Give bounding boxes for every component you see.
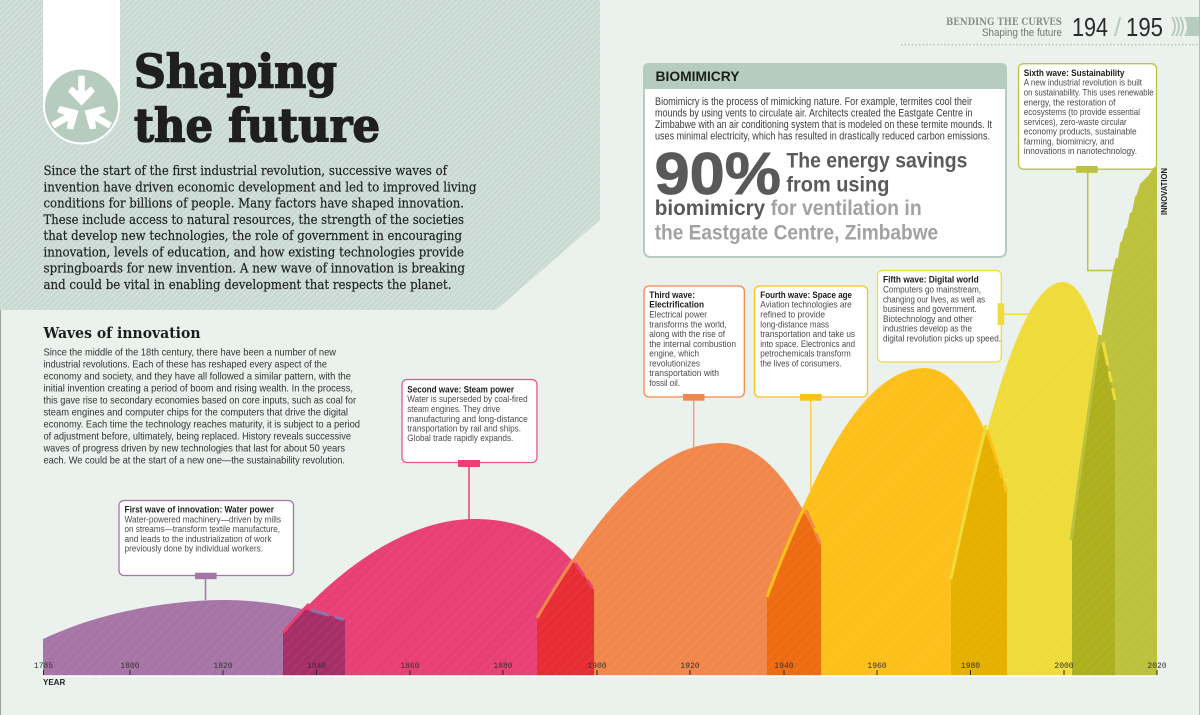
text block: waves of innovation: of adjustment before, ultimately, being replaced. History reveals successive (44, 432, 351, 443)
overlap: wave 2 and 3 (537, 562, 594, 676)
text block: statistic caption: biomimicry (655, 196, 765, 220)
chart: waves of innovation (34, 160, 1169, 687)
page header: 194 (1072, 12, 1108, 42)
callout: fifth wave: business and government. (883, 303, 977, 314)
text block: waves of innovation: initial invention creating a period of boom and rising wealth. In the process, (44, 384, 353, 395)
callout: sixth wave: innovations in nanotechnology. (1024, 145, 1137, 156)
callout: fourth wave: transportation and take us (760, 328, 855, 339)
overlap: wave 4 and 5 (951, 433, 1007, 676)
callout: sixth wave: A new industrial revolution is built (1024, 77, 1142, 88)
text block: statistic caption: from using (786, 173, 889, 197)
callout: third wave: fossil oil. (649, 377, 680, 388)
axis labels and ticks: 1940 (774, 662, 794, 671)
text block: intro: and could be vital in enabling development that respects the planet. (44, 278, 452, 293)
axis labels and ticks: 2000 (1054, 662, 1074, 671)
title: the future (134, 98, 380, 152)
callout: fifth wave (878, 270, 1029, 362)
page header: BENDING THE CURVES (946, 17, 1062, 28)
axis labels and ticks: 1820 (213, 662, 233, 671)
axis labels and ticks: 2020 (1147, 662, 1167, 671)
callout: second wave: Global trade rapidly expands. (407, 432, 513, 443)
callout: fifth wave: digital revolution picks up speed. (883, 332, 1001, 343)
text block: intro: innovation, levels of education, and how existing technologies provide (44, 245, 464, 260)
axis labels and ticks: 1860 (400, 662, 420, 671)
text block: intro: Since the start of the first industrial revolution, successive waves of (44, 164, 448, 179)
callout: fourth wave: Aviation technologies are (760, 299, 852, 310)
callout: sixth wave: energy, the restoration of (1024, 96, 1116, 107)
callout: first wave: First wave of innovation: Water power (124, 504, 274, 514)
text block: waves of innovation: waves of progress driven by new technologies that last for about 50 years (43, 444, 345, 455)
callout: fourth wave: the lives of consumers. (760, 357, 842, 368)
callout: sixth wave: ecosystems (to provide essential (1024, 106, 1140, 117)
page header: 195 (1126, 12, 1163, 42)
page header (901, 12, 1199, 45)
rising and falling edge strokes (283, 335, 1115, 633)
axis labels and ticks: 1785 (34, 662, 53, 671)
text block: waves of innovation: industrial revolutions. Each of these has reshaped every aspect of the (44, 360, 327, 371)
title (134, 44, 380, 152)
callout: first wave: Water-powered machinery—driven by mills (124, 513, 281, 524)
axis labels and ticks (34, 662, 1167, 675)
axis labels and ticks: 1960 (867, 662, 887, 671)
text block: biomimicry description: mounds by using vents to circulate air. Architects created the Eastgate Centre in (655, 108, 973, 120)
callout: second wave: Second wave: Steam power (407, 383, 514, 394)
callout: third wave: transportation with (649, 367, 719, 378)
page header: / (1114, 12, 1122, 42)
callout: fourth wave: Fourth wave: Space age (760, 289, 852, 300)
heading: waves of innovation: Waves of innovation (43, 324, 201, 342)
text block: waves of innovation: this gave rise to secondary economies based on core inputs, such as coal for (44, 396, 357, 407)
heading: biomimicry: BIOMIMICRY (656, 68, 740, 84)
overlap: wave 1 and 2 (283, 610, 345, 676)
callout: third wave: Electrification (649, 299, 704, 310)
callout: sixth wave: Sixth wave: Sustainability (1024, 67, 1125, 78)
text block: biomimicry description: Biomimicry is the process of mimicking nature. For example, termites cool their (655, 96, 972, 108)
axis labels and ticks: 1880 (493, 662, 513, 671)
callout: third wave: Electrical power (649, 308, 707, 320)
callout: third wave: along with the rise of (649, 328, 725, 339)
callout: first wave: previously done by individual workers. (124, 543, 263, 554)
axis labels and ticks: 1840 (307, 662, 326, 671)
page header: Shaping the future (982, 27, 1062, 39)
callout: second wave: transportation by rail and ships. (407, 423, 521, 434)
callout: third wave: revolutionizes (649, 357, 700, 368)
callout: first wave: on streams—transform textile manufacture, (124, 523, 280, 534)
text block: intro: invention have driven economic development and led to improved living (44, 180, 477, 195)
text block: waves of innovation: each. We could be at the start of a new one—the sustainability revolution. (44, 456, 345, 467)
icon: ribbon with converging arrows (43, 0, 120, 144)
statistic: 90%: 90% (654, 141, 781, 207)
callout: fifth wave: changing our lives, as well as (883, 293, 985, 304)
callout: third wave: the internal combustion (649, 338, 736, 349)
wave 1: water power (43, 600, 345, 676)
text block: intro: that develop new technologies, the role of government in encouraging (44, 229, 462, 244)
axis labels and ticks: 1980 (961, 662, 980, 671)
text block: biomimicry description: uses minimal electricity, which has resulted in drastically reduced carbon emissions. (655, 131, 990, 143)
callout: third wave: Third wave: (649, 289, 695, 300)
callout: fifth wave: Biotechnology and other (883, 313, 973, 324)
axis title: innovation: INNOVATION (1160, 168, 1169, 215)
callout: third wave: transforms the world, (649, 318, 727, 329)
callout: sixth wave: economy products, sustainable (1024, 126, 1136, 137)
callout: second wave: Water is superseded by coal-fired (407, 393, 528, 404)
callout: fifth wave: Fifth wave: Digital world (883, 274, 979, 285)
callout: fifth wave: Computers go mainstream, (883, 284, 981, 294)
wave 2: steam power (283, 519, 594, 676)
callout: first wave (119, 500, 294, 600)
callout: fifth wave: industries develop as the (883, 323, 972, 334)
callout: second wave (402, 380, 537, 520)
text block: waves of innovation: economy. Each time the technology reaches maturity, it is subject to a period (44, 420, 360, 431)
text block: waves of innovation (43, 348, 360, 467)
text block: waves of innovation: steam engines and computer chips for the computers that drive the digital (44, 408, 348, 419)
callout: fourth wave: petrochemicals transform (760, 348, 851, 359)
callout: third wave: engine, which (649, 348, 699, 359)
axis labels and ticks: 1920 (680, 662, 700, 671)
callout: sixth wave (1018, 64, 1156, 271)
callout: second wave: steam engines. They drive (407, 403, 500, 414)
overlap: wave 5 and 6 (1072, 343, 1115, 676)
panel: intro background (0, 0, 600, 310)
panel: biomimicry (643, 63, 1007, 257)
wave 3: electrification (537, 443, 821, 676)
text block: statistic caption: for ventilation in (771, 196, 922, 220)
text block: biomimicry description: Zimbabwe with an air conditioning system that is modeled on these termite mounds. It (655, 119, 992, 131)
axis baseline (43, 675, 1157, 677)
text block: statistic caption (655, 149, 967, 244)
callout: third wave (644, 286, 744, 447)
text block: intro (44, 164, 477, 293)
wave 6: sustainability (1072, 167, 1157, 676)
callout: second wave: manufacturing and long-distance (407, 413, 528, 424)
callout: first wave: and leads to the industrialization of work (124, 533, 272, 544)
callout: fourth wave: refined to provide (760, 308, 825, 320)
callout: sixth wave: farming, biomimicry, and (1024, 135, 1114, 146)
callout: fourth wave: long-distance mass (760, 318, 829, 329)
axis labels and ticks: 1900 (587, 662, 607, 671)
axis labels and ticks: 1800 (120, 662, 140, 671)
text block: intro: conditions for billions of people. Many factors have shaped innovation. (44, 197, 464, 212)
callout: sixth wave: on sustainability. This uses renewable (1024, 86, 1154, 98)
text block: statistic caption: the Eastgate Centre, Zimbabwe (655, 220, 938, 244)
text block: intro: springboards for new invention. A new wave of innovation is breaking (44, 262, 465, 277)
title: Shaping (134, 44, 337, 98)
text block: waves of innovation: Since the middle of the 18th century, there have been a number of new (44, 348, 337, 359)
text block: biomimicry description (655, 96, 992, 143)
axis title: year: YEAR (43, 678, 65, 687)
text block: statistic caption: The energy savings (786, 149, 967, 173)
overlap: wave 3 and 4 (767, 509, 821, 676)
callout: sixth wave: services), zero-waste circular (1024, 116, 1127, 127)
callout: fourth wave: into space. Electronics and (760, 338, 855, 349)
wave 4: space age (767, 368, 1007, 676)
wave 5: digital world (951, 282, 1115, 676)
text block: waves of innovation: economy and society, and they have all followed a similar pattern, with the (44, 372, 351, 383)
callout: fourth wave (754, 286, 868, 493)
text block: intro: These include access to natural resources, the strength of the societies (44, 213, 464, 228)
